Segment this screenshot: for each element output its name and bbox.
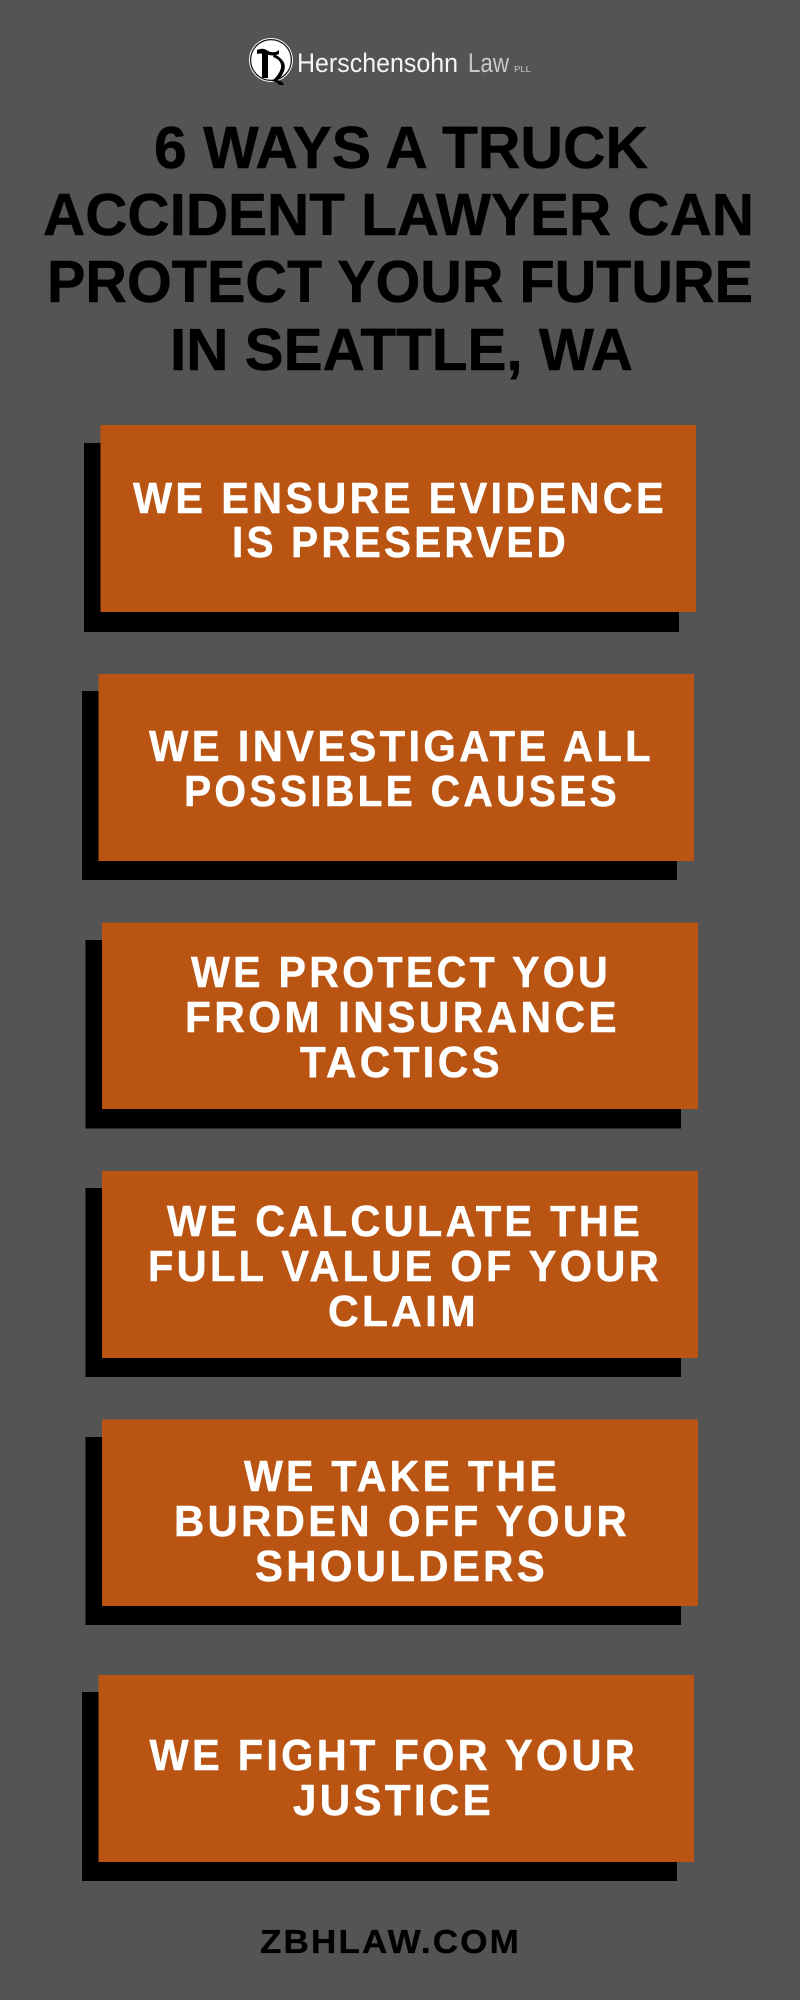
- panel: we investigate all possible causes: POSSIBLE CAUSES: [184, 767, 620, 816]
- logo wordmark: Law: Law: [468, 48, 509, 78]
- panel: we protect you from insurance tactics: TACTICS: [300, 1038, 503, 1087]
- panel: we ensure evidence is preserved: [84, 425, 696, 632]
- panel: we ensure evidence is preserved: IS PRESERVED: [232, 518, 569, 567]
- panel: we calculate the full value of your claim: WE CALCULATE THE: [167, 1197, 643, 1246]
- panel: we calculate the full value of your claim: [86, 1171, 698, 1377]
- panel: we investigate all possible causes: [82, 674, 694, 880]
- logo: Herschensohn Law PLLC: [250, 38, 531, 85]
- title: PROTECT YOUR FUTURE: [47, 249, 753, 315]
- logo wordmark: PLL: PLL: [514, 64, 531, 74]
- panel: we protect you from insurance tactics: [86, 922, 698, 1128]
- panel: we fight for your justice: JUSTICE: [293, 1776, 494, 1825]
- panel: we protect you from insurance tactics: WE PROTECT YOU: [191, 948, 611, 997]
- panel: we calculate the full value of your claim: FULL VALUE OF YOUR: [148, 1242, 662, 1291]
- panel: we take the burden off your shoulders: BURDEN OFF YOUR: [174, 1497, 630, 1546]
- panel: we take the burden off your shoulders: WE TAKE THE: [244, 1452, 560, 1501]
- panel: we take the burden off your shoulders: [86, 1420, 698, 1625]
- title: IN SEATTLE, WA: [170, 317, 633, 383]
- panel: we protect you from insurance tactics: FROM INSURANCE: [185, 993, 620, 1042]
- panel: we fight for your justice: WE FIGHT FOR YOUR: [150, 1731, 638, 1780]
- panel: we take the burden off your shoulders: SHOULDERS: [255, 1542, 548, 1591]
- icon: monogram seal: [250, 38, 292, 85]
- panel: we investigate all possible causes: WE INVESTIGATE ALL: [149, 722, 654, 771]
- title: 6 WAYS A TRUCK: [154, 115, 648, 181]
- panel: we ensure evidence is preserved: WE ENSURE EVIDENCE: [133, 474, 667, 523]
- logo wordmark: Herschensohn: [297, 48, 458, 78]
- title: ACCIDENT LAWYER CAN: [43, 182, 754, 248]
- panel: we fight for your justice: [82, 1675, 694, 1881]
- title: [43, 115, 754, 383]
- footer website: ZBHLAW.COM: [260, 1923, 521, 1960]
- panel: we calculate the full value of your claim: CLAIM: [328, 1287, 479, 1336]
